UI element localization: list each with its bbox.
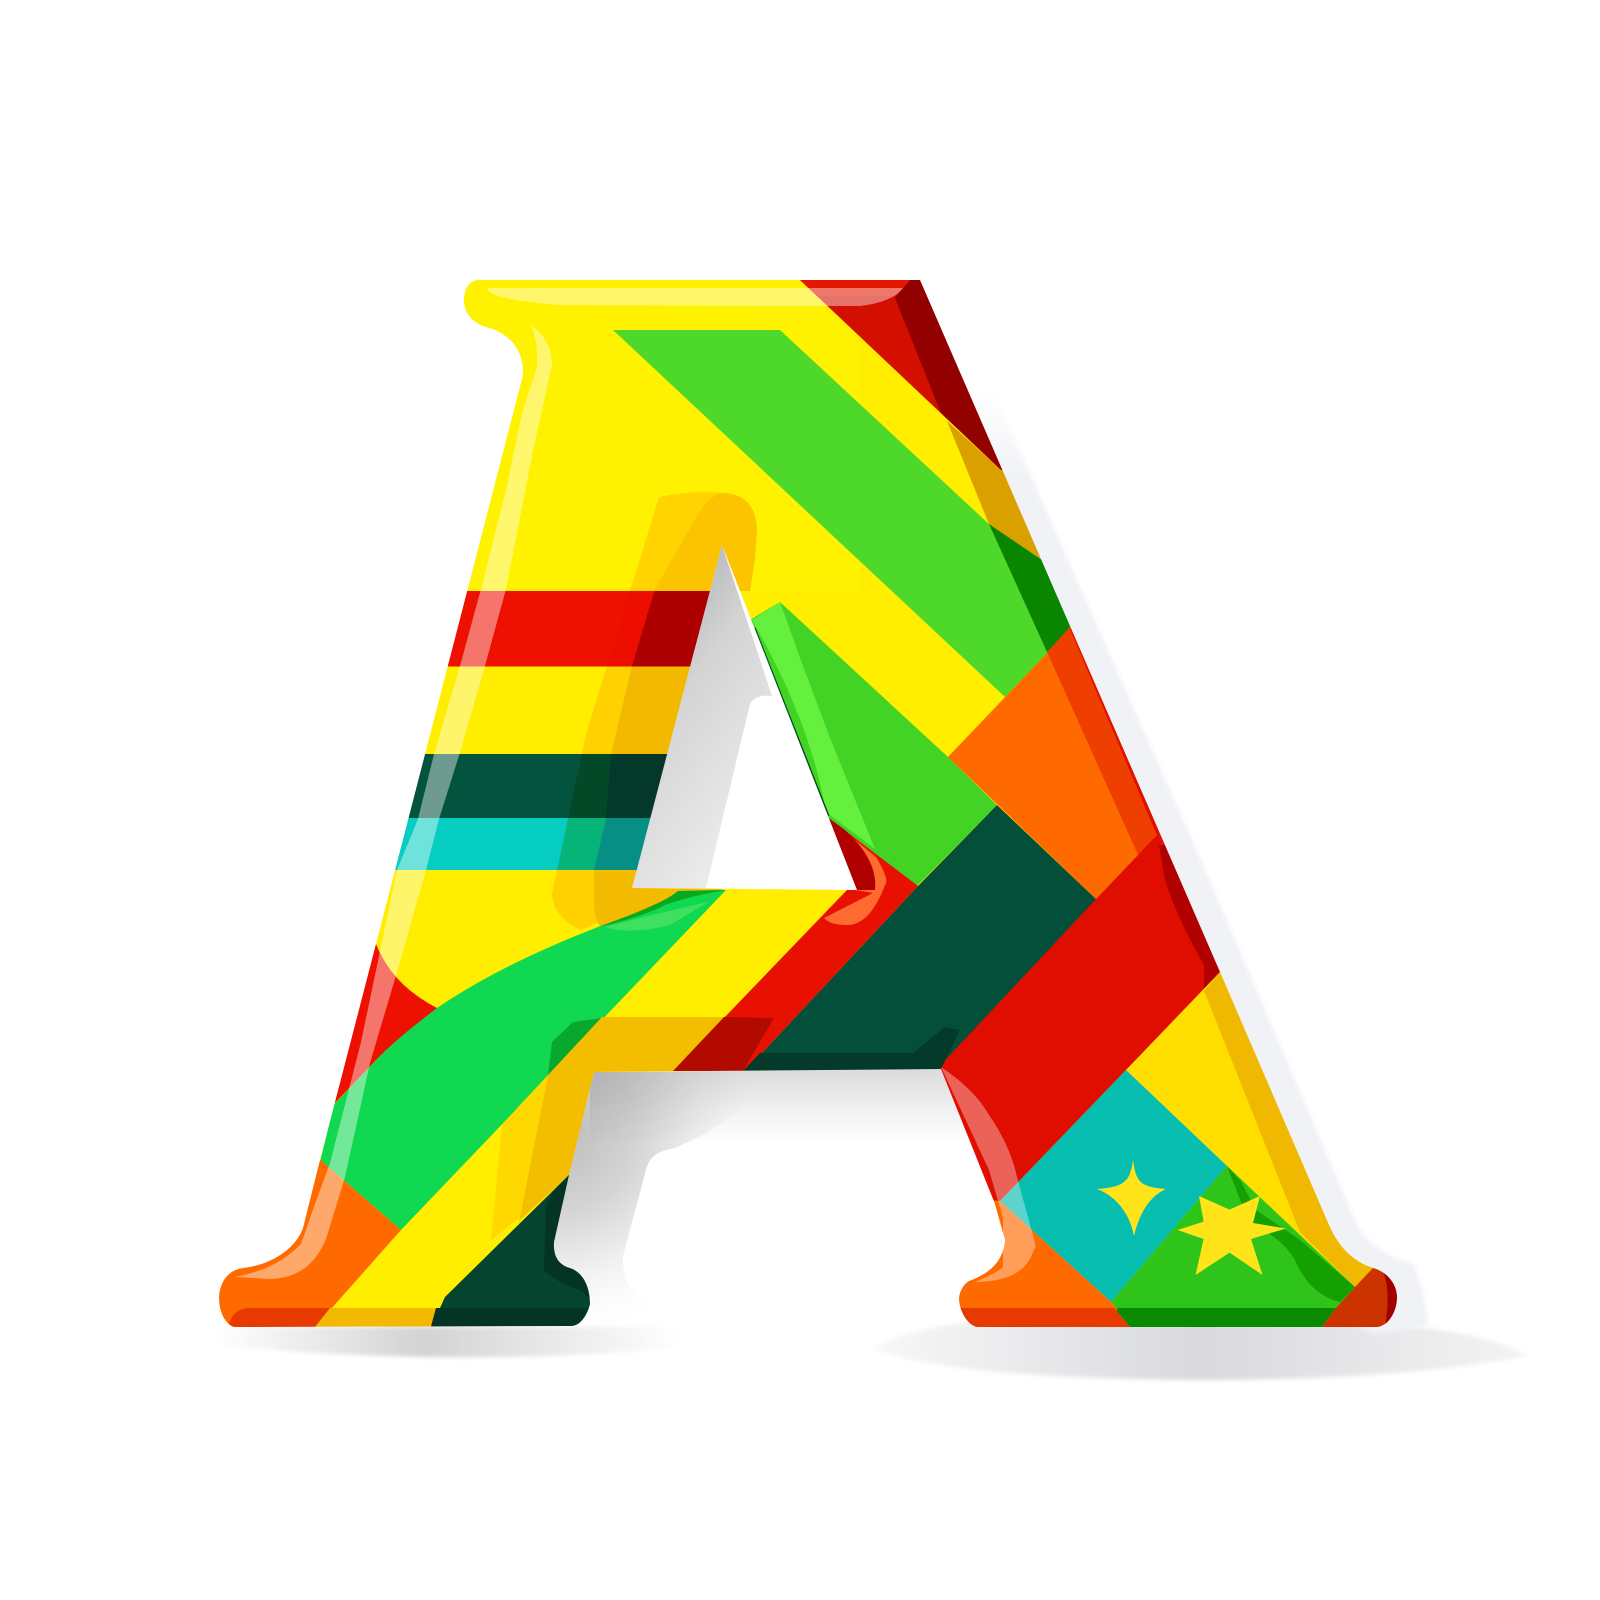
dark green foot shade [430,1175,600,1330]
orange highlight by counter [824,816,886,925]
teal diamond [1000,1070,1227,1302]
top serif highlight [487,288,903,306]
bottom orange-red strip [950,1308,1130,1327]
large red band [941,836,1204,1201]
left edge highlight [234,325,552,1279]
lower green band [750,602,997,886]
dark green foot [440,1175,590,1308]
dark green sliver [598,890,726,927]
light shade around counter [552,492,724,930]
right yellow panel [1126,972,1355,1287]
counter right green highlight [752,602,875,849]
floor shadow: left foot [215,1327,680,1357]
crossbar dark red shade [673,1017,774,1071]
orange-red edge strip [1047,625,1165,857]
shadow beside left leg [540,1072,760,1330]
lower left red wedge [334,944,437,1104]
top right red corner [800,280,1005,470]
bottom green strip [1114,1308,1336,1327]
amber right strip [1204,970,1380,1287]
crossbar dark green shade [743,1027,960,1071]
left leg bands [395,591,654,870]
shadow inside counter [632,545,772,888]
floor shadow: right foot [873,1322,1527,1380]
right foot red corner [1322,1268,1388,1327]
left foot red-orange strip [228,1308,330,1327]
icon: five-point star [1178,1196,1286,1275]
light yellow-amber leg shade [491,1075,548,1240]
dark red by counter [826,816,875,890]
bottom green panel [1111,1166,1355,1310]
central red band [673,816,918,1071]
icon: four-point star [1097,1160,1166,1236]
red edge line [1070,625,1168,838]
dark red edge of band [1159,845,1220,988]
left foot orange [200,1160,401,1327]
shadow under crossbar [590,1069,975,1147]
green sheen [605,902,708,931]
yellow foot amber strip [315,1308,440,1327]
bottom orange panel [950,1195,1118,1310]
top green band [613,330,1070,697]
letter body [200,260,1420,1340]
base yellow [315,336,1356,1327]
green notch shade [548,1018,602,1075]
amber crossbar shade [519,1017,724,1221]
amber edge strip [947,421,1045,562]
right foot dark corner [1384,1273,1397,1324]
top yellow tone [440,270,860,590]
pale shadow along right diagonal [966,386,1428,1335]
dark green edge strip [989,524,1075,652]
dark shade around counter [594,493,757,926]
green panel shading [1227,1166,1355,1302]
counter right dark edge [754,628,828,816]
right leg highlight [941,1067,1035,1282]
illustration: patterned letter A [219,280,1521,1382]
curved bright green band [320,890,726,1230]
orange panel [948,652,1138,899]
dark green panel [745,805,1097,1071]
